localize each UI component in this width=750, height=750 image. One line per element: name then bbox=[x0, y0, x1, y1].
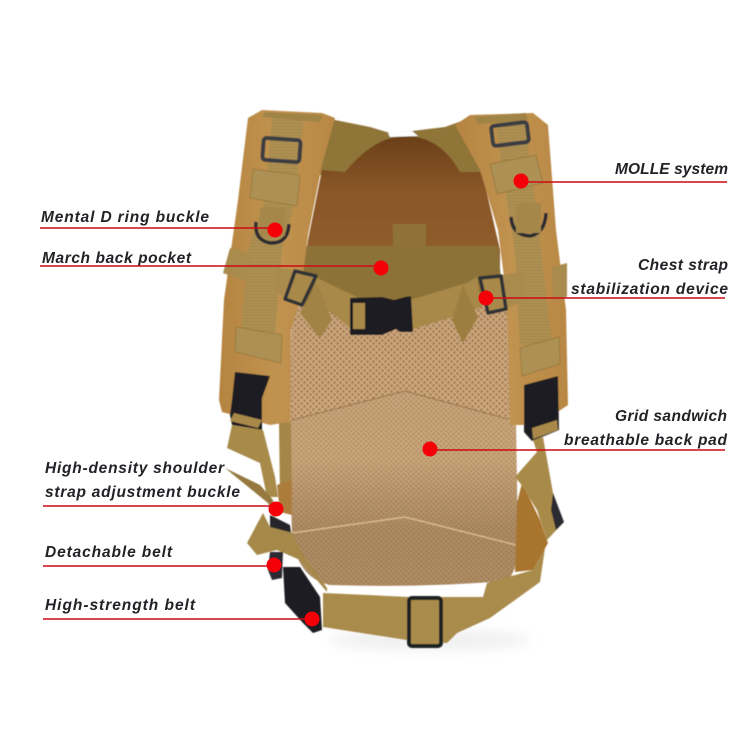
chest strap right tail bbox=[452, 285, 478, 343]
right top square ring bbox=[491, 122, 529, 146]
right molle band upper bbox=[490, 155, 543, 194]
inner back panel bbox=[300, 136, 500, 300]
right shoulder pad bbox=[455, 113, 568, 425]
belt buckle bbox=[283, 567, 322, 633]
chest strap right bbox=[410, 277, 482, 330]
left side buckle bbox=[230, 372, 270, 430]
callout: Chest strap stabilization device bbox=[478, 257, 728, 306]
pocket bbox=[296, 246, 503, 320]
callout: High-density shoulder strap adjustment buckle bbox=[43, 460, 284, 516]
adjuster buckle bbox=[270, 515, 292, 540]
backpack drawing bbox=[219, 110, 568, 646]
callout: Mental D ring buckle bbox=[40, 209, 282, 238]
leader line bbox=[40, 265, 381, 267]
right strap to slider bbox=[500, 272, 525, 308]
left molle band upper bbox=[250, 169, 300, 206]
left shoulder pad bbox=[219, 110, 335, 425]
right belt clip bbox=[551, 493, 564, 530]
marker bbox=[514, 174, 528, 188]
right vertical webbing bbox=[495, 118, 552, 345]
left top tab bbox=[262, 112, 322, 122]
backpack illustration bbox=[219, 110, 568, 650]
marker bbox=[268, 222, 282, 238]
marker bbox=[422, 442, 438, 456]
chest left slider bbox=[285, 271, 316, 305]
callout: Grid sandwich breathable back pad bbox=[422, 408, 728, 456]
right hip pad bbox=[515, 483, 548, 572]
label: Detachable belt bbox=[45, 544, 173, 561]
chest strap left tail bbox=[300, 283, 332, 338]
chest buckle strap bbox=[353, 303, 365, 329]
chest right slider bbox=[480, 276, 506, 313]
top handle gap bbox=[388, 131, 418, 137]
right buckle strap bbox=[532, 420, 558, 439]
hip belt bbox=[323, 548, 545, 643]
left d ring strap bbox=[260, 208, 285, 236]
label line 2: stabilization device bbox=[571, 281, 728, 298]
grab tab bbox=[393, 224, 426, 248]
label: High-strength belt bbox=[45, 597, 196, 614]
label line 2: breathable back pad bbox=[564, 432, 728, 449]
left d ring bbox=[256, 222, 289, 243]
left molle band lower bbox=[235, 327, 282, 363]
ground shadow bbox=[330, 630, 530, 650]
mesh lower ridge bbox=[292, 517, 516, 545]
leader line bbox=[43, 618, 312, 620]
marker bbox=[266, 558, 282, 572]
mesh back pad bbox=[289, 305, 518, 586]
mesh upper ridge bbox=[292, 391, 508, 420]
callout: MOLLE system bbox=[514, 161, 728, 188]
top carry strap bbox=[310, 118, 482, 175]
leader line bbox=[486, 297, 725, 299]
left top square ring bbox=[262, 138, 301, 162]
right lower strap bbox=[515, 437, 563, 540]
left narrow strap bbox=[279, 422, 292, 505]
label: Mental D ring buckle bbox=[41, 209, 209, 226]
left lower strap bbox=[227, 425, 278, 497]
marker bbox=[478, 290, 494, 306]
left lower pad bbox=[277, 480, 292, 515]
marker bbox=[304, 612, 320, 626]
label: March back pocket bbox=[42, 250, 192, 267]
belt slider bbox=[409, 598, 441, 646]
marker bbox=[374, 260, 388, 276]
leader line bbox=[430, 449, 725, 451]
callout: March back pocket bbox=[40, 250, 388, 276]
leader line bbox=[521, 181, 727, 183]
right outer tab bbox=[552, 263, 567, 300]
chest buckle bbox=[350, 296, 413, 335]
leader line bbox=[40, 227, 275, 229]
left strap to slider bbox=[275, 268, 293, 297]
mesh upper panel bbox=[292, 305, 508, 420]
right side buckle bbox=[524, 376, 559, 441]
left hip pad bbox=[247, 513, 327, 592]
left buckle strap bbox=[230, 413, 262, 428]
marker bbox=[268, 502, 284, 516]
label: MOLLE system bbox=[615, 161, 728, 178]
left shoulder strap flap bbox=[225, 468, 275, 520]
left side tab bbox=[223, 248, 250, 282]
label line 1: Chest strap bbox=[638, 257, 728, 274]
chest strap left bbox=[310, 278, 357, 330]
callout: Detachable belt bbox=[43, 544, 282, 572]
label line 2: strap adjustment buckle bbox=[45, 484, 240, 501]
label line 1: Grid sandwich bbox=[615, 408, 727, 425]
right d ring bbox=[511, 213, 546, 236]
left vertical webbing bbox=[240, 118, 304, 345]
callout: High-strength belt bbox=[43, 597, 320, 626]
right molle band lower bbox=[520, 337, 560, 376]
right d ring strap bbox=[516, 203, 541, 233]
leader line bbox=[43, 565, 274, 567]
detachable buckle piece bbox=[268, 552, 283, 580]
leader line bbox=[43, 505, 276, 507]
right top tab bbox=[474, 113, 528, 124]
mesh lower shading bbox=[289, 305, 518, 586]
label line 1: High-density shoulder bbox=[45, 460, 225, 477]
